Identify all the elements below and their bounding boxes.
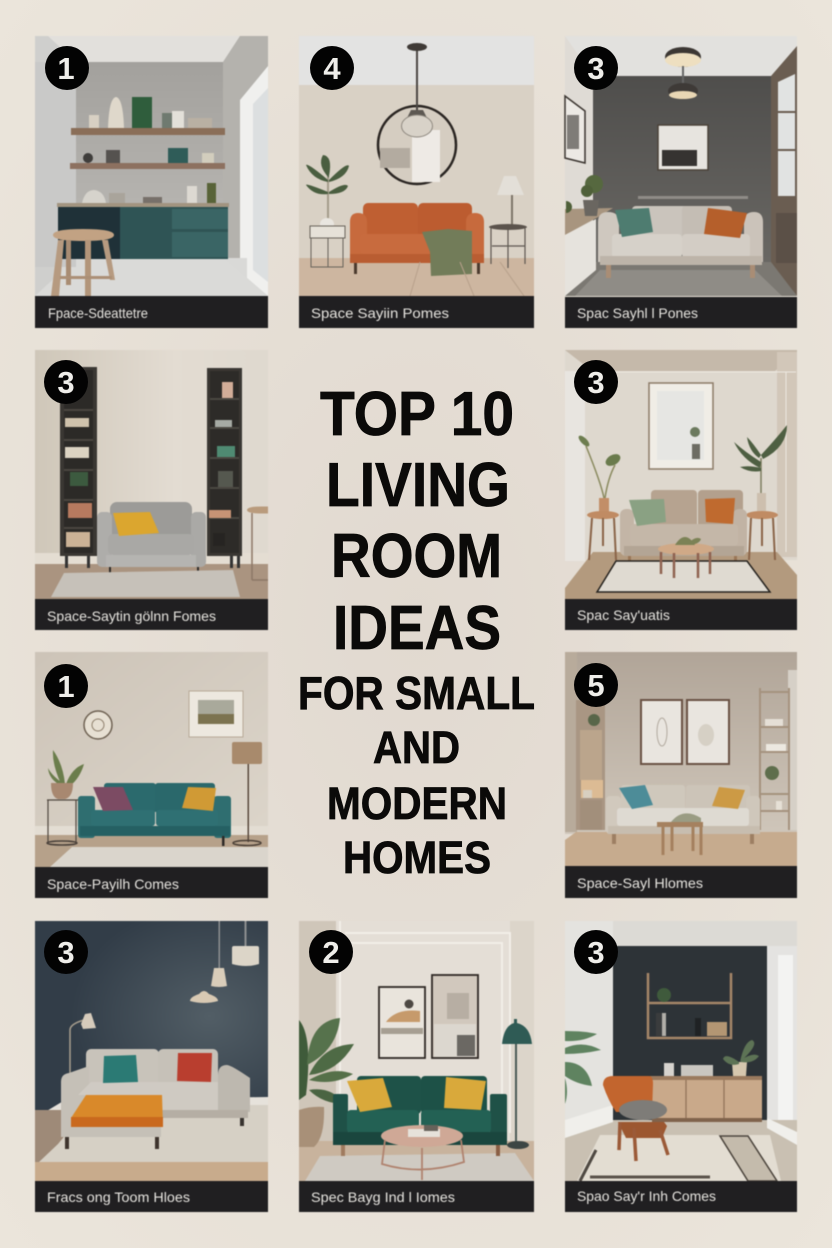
teal pillow	[103, 1055, 138, 1083]
round coffee table	[381, 1125, 464, 1180]
orange sofa	[350, 203, 484, 274]
chaise legs	[67, 1137, 157, 1149]
number badge	[574, 663, 618, 707]
purple pillow	[93, 787, 133, 811]
number badge	[44, 930, 88, 974]
number badge	[309, 930, 353, 974]
orange chaise cushion	[71, 1095, 163, 1127]
title: LIVING	[326, 451, 510, 520]
orange pillow	[705, 498, 735, 524]
yellow pillow	[113, 512, 159, 536]
caption bar: Space-Payilh Comes	[47, 876, 179, 892]
stool	[51, 229, 115, 296]
left wall frame	[565, 96, 585, 163]
number badge: 3	[587, 935, 605, 970]
right plant and table	[734, 425, 787, 560]
panel: card 4 grey armchair with tall shelves	[35, 350, 268, 630]
caption bar: Spac Say'uatis	[577, 607, 670, 623]
ledge and plant	[565, 175, 613, 296]
wall shelf	[648, 973, 731, 1038]
caption bar: Space Sayiin Pomes	[311, 305, 449, 321]
framed prints	[379, 975, 478, 1058]
panel: card 7 beige sofa with two frames	[565, 652, 797, 898]
number badge	[44, 360, 88, 404]
large framed art	[649, 383, 713, 469]
title: HOMES	[343, 832, 491, 883]
cabinet	[57, 203, 229, 259]
floor boards	[410, 262, 524, 296]
green floor lamp	[502, 1019, 532, 1149]
number badge: 3	[57, 365, 75, 400]
panel: card 10 dark wall with orange chair	[565, 921, 797, 1212]
number badge	[45, 46, 89, 90]
panel: card 6 teal sofa	[35, 652, 268, 898]
number badge: 3	[587, 365, 605, 400]
wall art	[658, 125, 708, 170]
caption bar	[565, 1181, 797, 1212]
potted plant	[723, 1040, 759, 1076]
number badge: 3	[587, 51, 605, 86]
panel: card 3 grey wall beige sofa	[565, 36, 797, 328]
number badge	[574, 930, 618, 974]
beige sofa	[598, 196, 763, 278]
panel: card 1 shelves and cabinet	[35, 36, 268, 328]
caption bar: Spac Sayhl l Pones	[577, 305, 698, 321]
pendant lamps	[190, 921, 259, 1003]
orange chair	[603, 1076, 668, 1161]
title: ROOM	[331, 522, 502, 591]
coffee table with plant	[658, 537, 714, 578]
left plant and table	[577, 434, 622, 560]
caption bar	[35, 599, 268, 630]
caption bar	[565, 297, 797, 328]
green sofa	[333, 1076, 507, 1156]
title	[298, 380, 535, 883]
left tall shelf	[60, 367, 97, 568]
right shelf	[760, 688, 789, 830]
rug	[597, 561, 770, 592]
floor lamp	[232, 742, 262, 846]
caption bar	[299, 296, 534, 328]
caption bar: Spec Bayg Ind l Iomes	[311, 1189, 455, 1205]
red pillow	[177, 1053, 212, 1082]
green throw	[422, 229, 472, 276]
grey armchair	[97, 502, 206, 575]
caption bar: Spao Say'r Inh Comes	[577, 1188, 716, 1204]
number badge	[44, 664, 88, 708]
rug	[577, 1135, 781, 1181]
rug	[305, 1153, 534, 1181]
number badge: 4	[323, 51, 341, 86]
title: TOP 10	[320, 380, 514, 449]
shelves	[70, 97, 225, 203]
number badge	[574, 360, 618, 404]
floor lamp	[70, 1013, 96, 1078]
caption bar: Space-Saytin gölnn Fomes	[47, 608, 216, 624]
teal sofa	[78, 783, 231, 846]
number badge	[574, 46, 618, 90]
caption bar	[35, 1181, 268, 1212]
caption bar	[299, 1181, 534, 1212]
plant on side table	[306, 155, 349, 267]
yellow pillow	[182, 787, 216, 811]
caption bar	[35, 296, 268, 328]
yellow pillow	[712, 787, 745, 809]
table lamp and table	[489, 176, 527, 268]
caption bar	[565, 866, 797, 898]
caption bar	[565, 599, 797, 630]
left shelf	[576, 700, 605, 830]
grey sectional sofa	[61, 1049, 250, 1137]
panel: card 8 dark wall sectional	[35, 921, 268, 1212]
panel: card 5 beige sofa with large frame	[565, 350, 797, 630]
panel: card 2 orange sofa with mirror	[299, 36, 534, 328]
number badge	[310, 46, 354, 90]
two framed prints	[641, 700, 729, 764]
beige sofa	[606, 785, 760, 844]
title: AND	[373, 722, 460, 773]
caption bar: Fracs ong Toom Hloes	[47, 1189, 190, 1205]
number badge: 5	[587, 668, 605, 703]
teal pillow	[615, 208, 653, 237]
ceiling lamps	[665, 47, 701, 99]
number badge: 2	[322, 935, 340, 970]
framed landscape	[189, 691, 243, 737]
caption bar	[35, 867, 268, 898]
right tall shelf	[207, 368, 242, 568]
wooden table with flowers	[657, 813, 703, 855]
green pillow	[629, 499, 666, 526]
blue pillow	[619, 785, 653, 809]
sideboard	[650, 1063, 762, 1122]
number badge: 1	[57, 51, 75, 86]
round wall plate	[84, 711, 112, 739]
caption bar: Space-Sayl Hlomes	[577, 875, 703, 891]
number badge: 1	[57, 669, 75, 704]
panel: card 9 green sofa with yellow pillows	[299, 921, 534, 1212]
taupe sofa	[620, 490, 747, 566]
orange pillow	[704, 208, 747, 238]
side table	[247, 506, 268, 580]
round mirror with pendant	[378, 43, 456, 184]
rug	[51, 570, 240, 597]
title: MODERN	[327, 778, 507, 829]
title: IDEAS	[333, 594, 501, 663]
title: FOR SMALL	[298, 667, 535, 719]
number badge: 3	[57, 935, 75, 970]
plant on side table	[47, 750, 84, 845]
caption bar: Fpace-Sdeattetre	[48, 305, 148, 321]
yellow pillows	[347, 1077, 486, 1112]
left plant	[565, 1031, 601, 1104]
plant in pot	[299, 1018, 354, 1147]
